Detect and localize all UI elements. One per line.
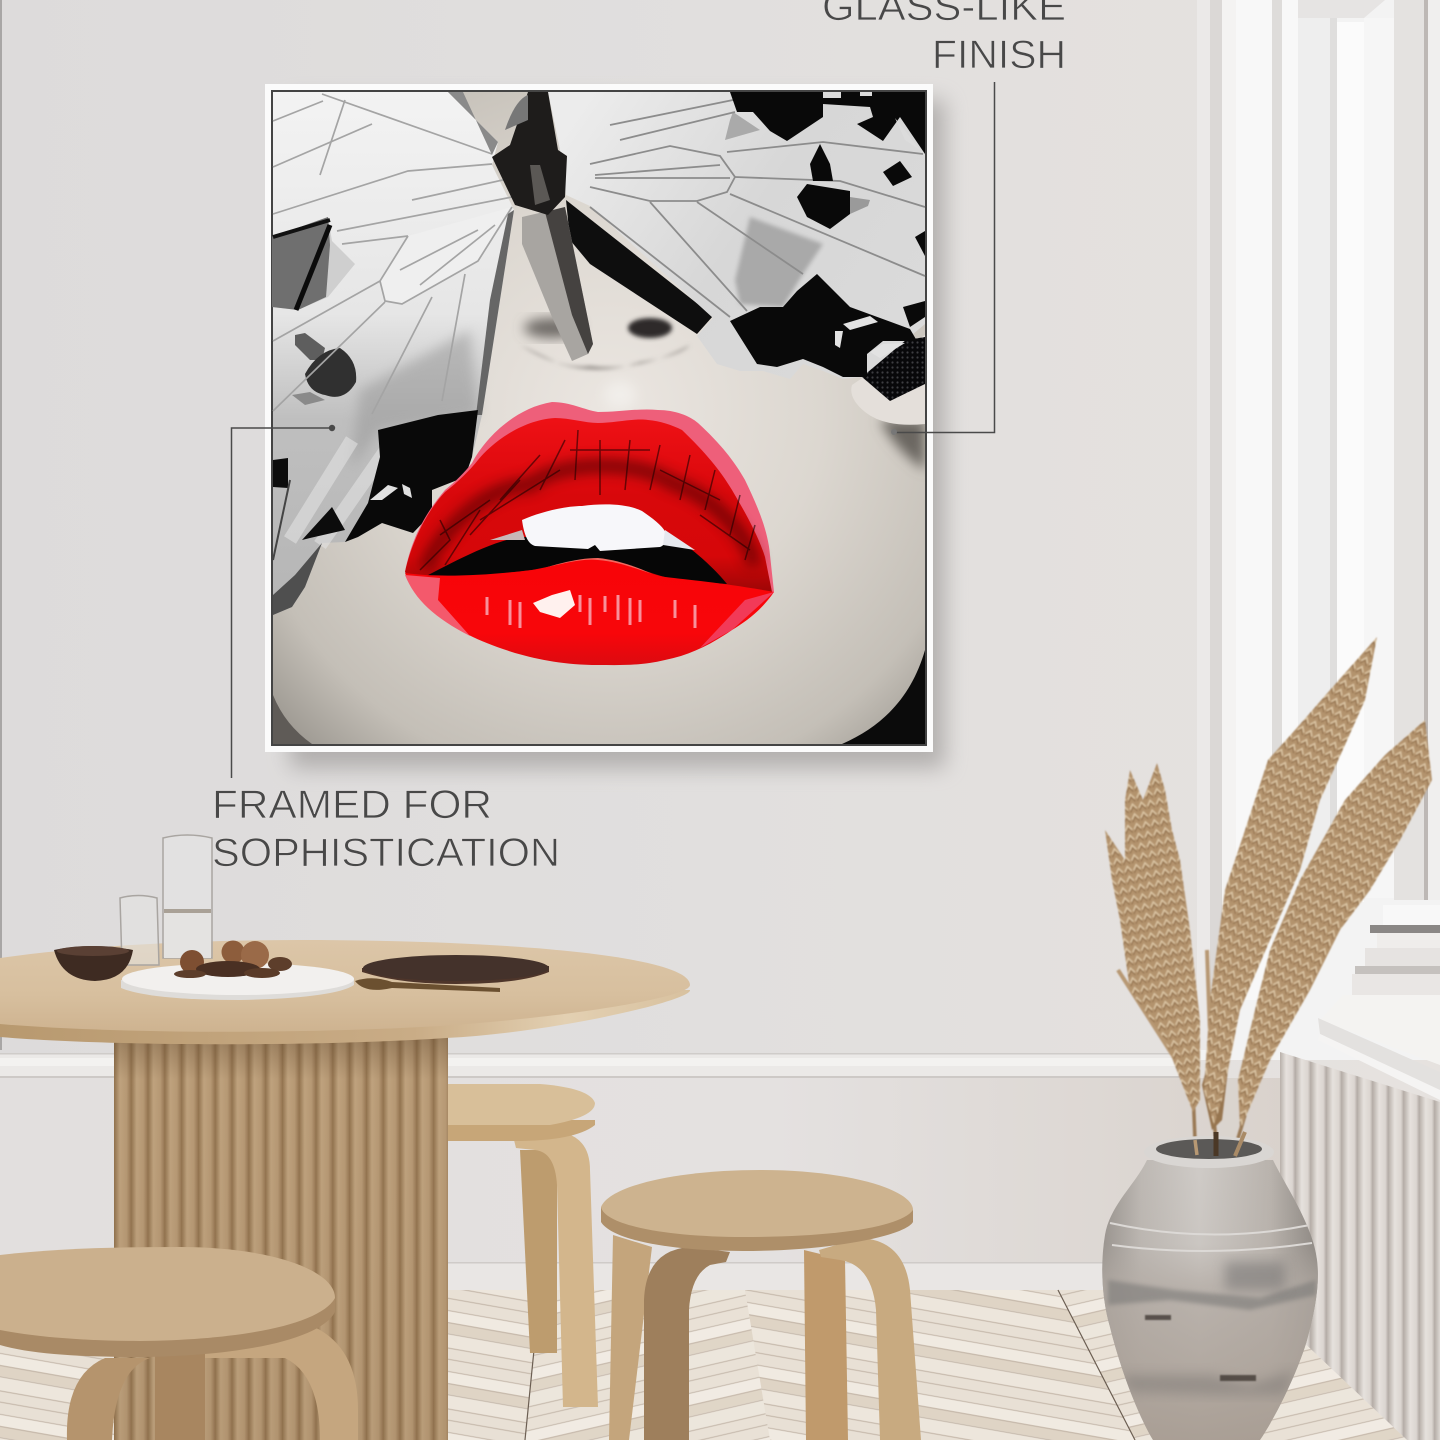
right wing black markings: [730, 92, 925, 377]
vase with pampas grass: [1100, 637, 1432, 1440]
round table top: [0, 940, 690, 1044]
right wing veins: [590, 100, 925, 317]
vase body: [1102, 1160, 1318, 1440]
left wing tail: [273, 543, 322, 615]
left wing grey blotches: [272, 217, 478, 545]
pampas grass: [1105, 637, 1432, 1145]
tongue: [525, 558, 658, 580]
right wing grey wash: [735, 217, 823, 307]
mouth interior: [412, 537, 727, 584]
front right stool: [601, 1170, 921, 1440]
left wing edge: [476, 210, 514, 415]
spoon: [355, 978, 500, 992]
framed artwork: [265, 84, 933, 752]
radiator: [1280, 1052, 1440, 1440]
window with frame: [1197, 0, 1440, 1100]
art: lips: [405, 402, 774, 665]
artwork shadow: [290, 100, 945, 768]
art: butterfly body: [492, 92, 593, 361]
left wing veins: [273, 94, 512, 414]
plume: right: [1238, 720, 1432, 1130]
plume: left: [1105, 763, 1200, 1112]
marble plate: [121, 963, 354, 1000]
window sill and books: [1318, 905, 1440, 1100]
callout: framed for sophistication: [212, 425, 560, 875]
tableware: [54, 835, 549, 1000]
lower lip: [405, 560, 774, 665]
art: nose: [520, 318, 690, 409]
front left stool: [0, 1247, 358, 1440]
art: dark corners: [273, 420, 925, 744]
wooden plate: [362, 955, 549, 984]
floor: [0, 1290, 1407, 1440]
fluted table base: [114, 1030, 448, 1440]
left wing black patch: [345, 410, 478, 542]
teeth: [490, 504, 695, 551]
callout: glass-like finish: FINISH: [932, 33, 1066, 77]
lower lip highlights: [487, 590, 695, 628]
art: earlobe and pearl earring: [851, 335, 925, 425]
dark bowl: [54, 946, 133, 981]
vase rim: [1144, 1132, 1274, 1168]
art: right butterfly wing: [548, 92, 925, 379]
callout: glass-like finish: [822, 0, 1066, 435]
callout: framed for sophistication: SOPHISTICATION: [212, 831, 560, 875]
left wing lighter cell: [380, 207, 512, 304]
plume: middle: [1204, 637, 1377, 1125]
plume: small centre: [1202, 1040, 1228, 1130]
rear stool: [448, 1084, 598, 1407]
nuts: [174, 940, 292, 978]
drinking glass: [120, 896, 159, 965]
upper lip red: [405, 418, 772, 592]
art: left butterfly wing: [272, 92, 514, 615]
glass carafe: [163, 835, 212, 958]
vase weathering: [1102, 1222, 1318, 1440]
upper lip pink rim: [405, 402, 774, 592]
callout: framed for sophistication: FRAMED FOR: [212, 783, 492, 827]
upper lip wrinkles: [420, 430, 755, 570]
